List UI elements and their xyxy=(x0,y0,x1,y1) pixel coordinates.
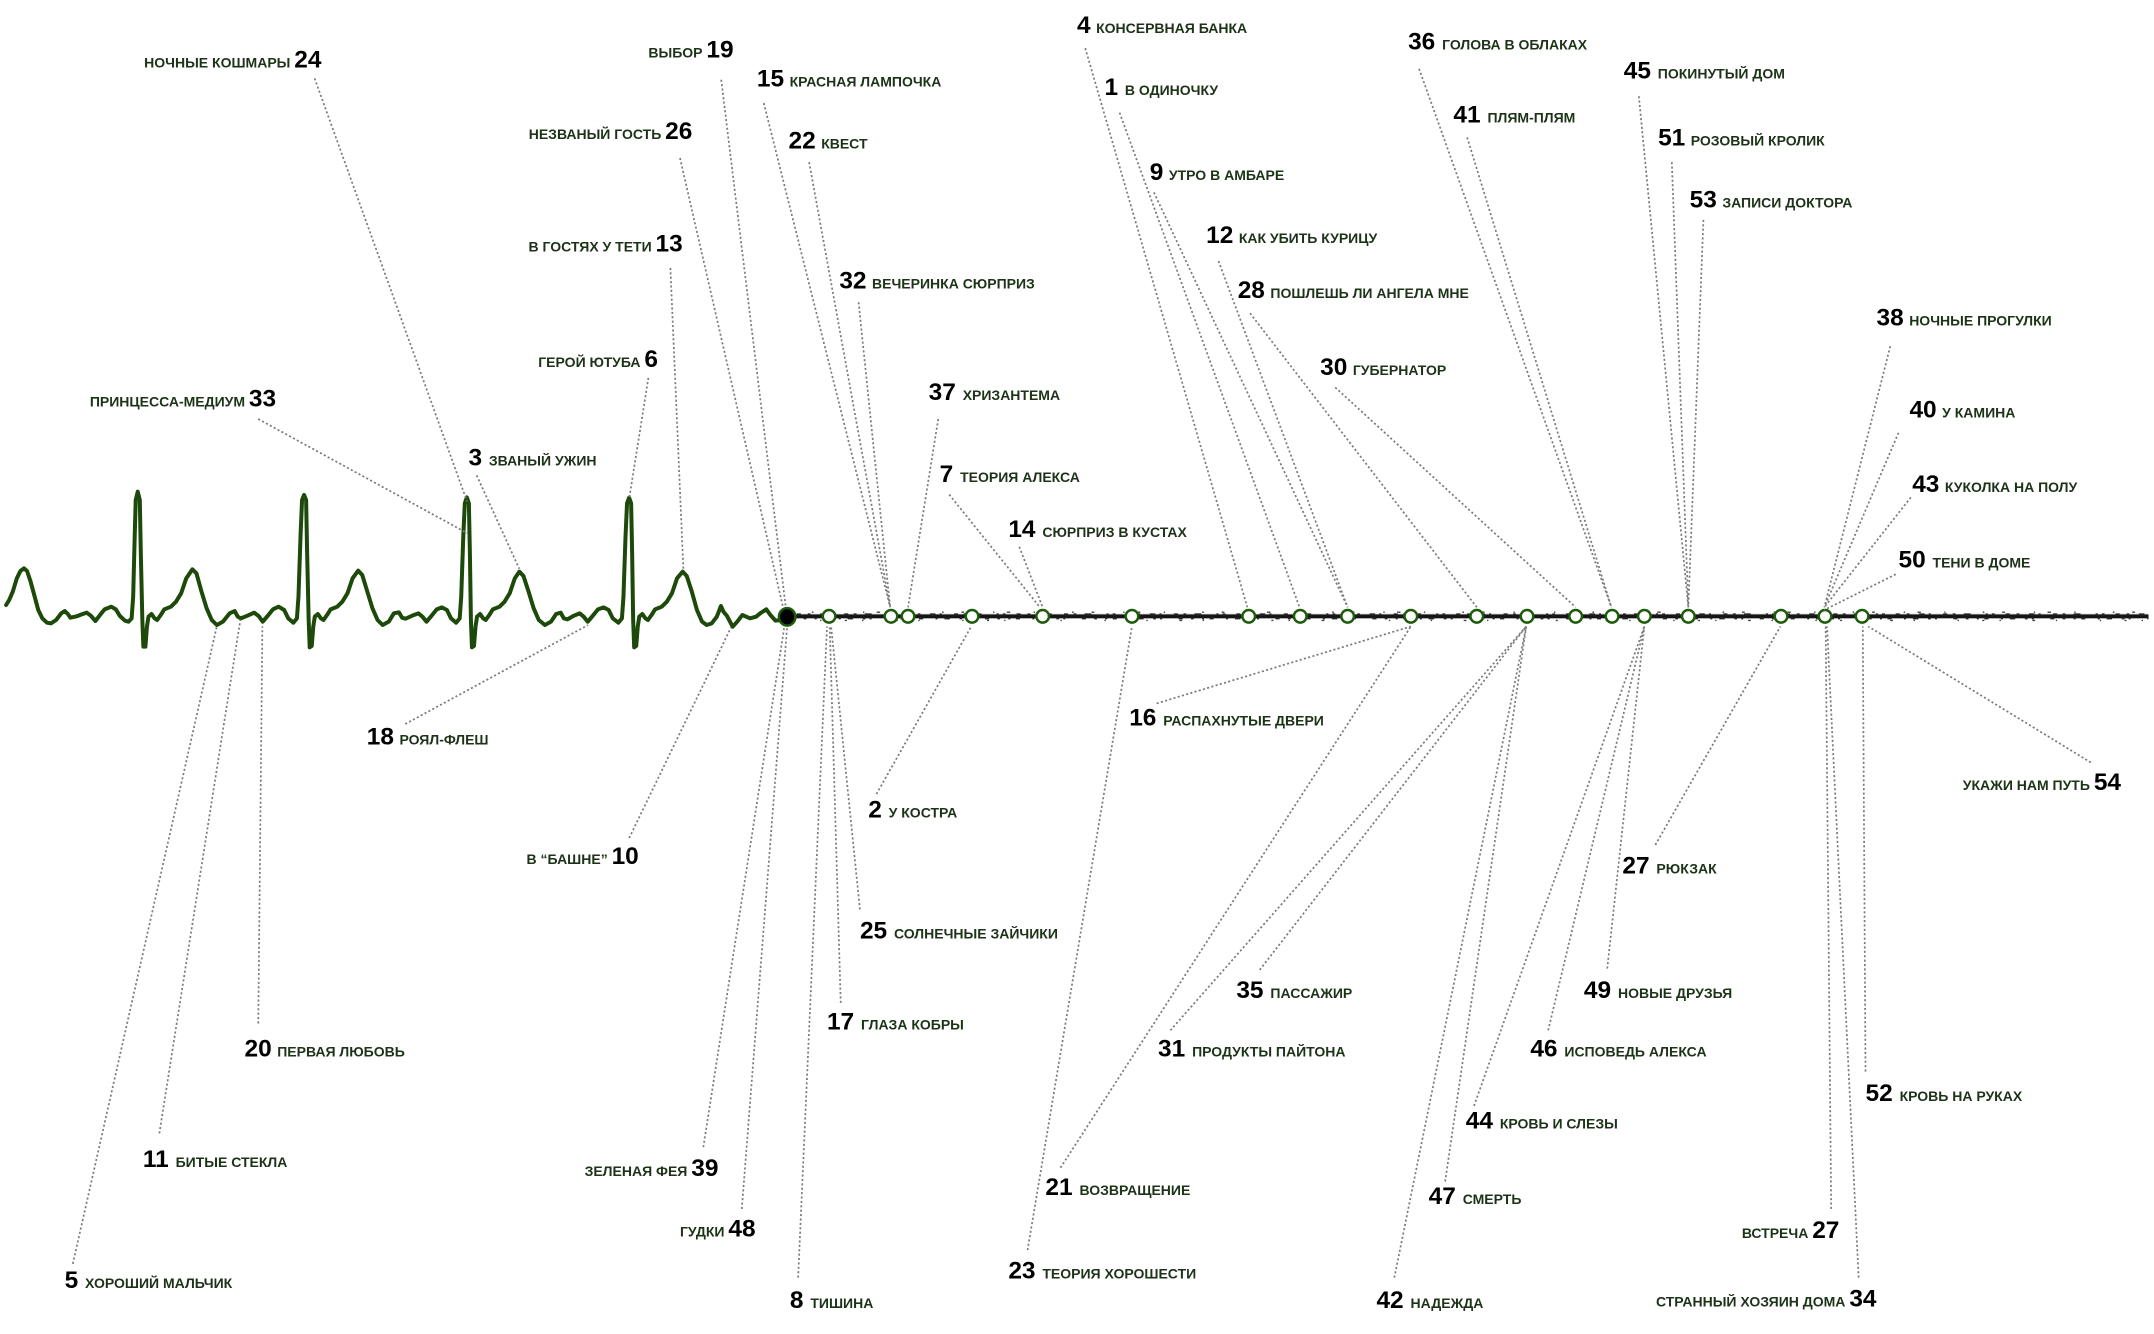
label 26 xyxy=(529,118,783,607)
label 53: 53 ЗАПИСИ ДОКТОРА xyxy=(1690,186,1852,213)
label 21: 21 ВОЗВРАЩЕНИЕ xyxy=(1045,1174,1190,1201)
label 15: 15 КРАСНАЯ ЛАМПОЧКА xyxy=(757,66,941,93)
label 47: 47 СМЕРТЬ xyxy=(1429,1183,1521,1210)
label 33: ПРИНЦЕССА-МЕДИУМ 33 xyxy=(90,386,276,413)
label 20: 20 ПЕРВАЯ ЛЮБОВЬ xyxy=(245,1035,405,1062)
label 27 backpack: 27 РЮКЗАК xyxy=(1622,853,1717,880)
label 51: 51 РОЗОВЫЙ КРОЛИК xyxy=(1658,125,1825,152)
label 14: 14 СЮРПРИЗ В КУСТАХ xyxy=(1008,516,1188,543)
label 20 xyxy=(245,626,405,1062)
label 40 xyxy=(1824,397,2015,607)
label 2 xyxy=(868,626,971,823)
label 42 xyxy=(1376,626,1526,1314)
label 49: 49 НОВЫЕ ДРУЗЬЯ xyxy=(1584,977,1732,1004)
label 35: 35 ПАССАЖИР xyxy=(1236,977,1352,1004)
label 17: 17 ГЛАЗА КОБРЫ xyxy=(827,1009,964,1036)
label 10: В “БАШНЕ” 10 xyxy=(527,843,639,870)
label 28: 28 ПОШЛЕШЬ ЛИ АНГЕЛА МНЕ xyxy=(1238,277,1469,304)
label 8: 8 ТИШИНА xyxy=(790,1287,873,1314)
label 27 meeting: ВСТРЕЧА 27 xyxy=(1742,1217,1839,1244)
label 18: 18 РОЯЛ-ФЛЕШ xyxy=(367,724,489,751)
label 27 meeting xyxy=(1742,626,1839,1244)
label 32: 32 ВЕЧЕРИНКА СЮРПРИЗ xyxy=(839,268,1035,295)
label 28 xyxy=(1238,277,1477,607)
label 30: 30 ГУБЕРНАТОР xyxy=(1320,354,1446,381)
label 41: 41 ПЛЯМ-ПЛЯМ xyxy=(1453,101,1575,128)
flat line after heartbeat xyxy=(787,612,2149,620)
label 50 xyxy=(1824,546,2030,610)
label 47 xyxy=(1429,626,1526,1210)
label 52: 52 КРОВЬ НА РУКАХ xyxy=(1866,1080,2023,1107)
heartbeat ECG line xyxy=(6,492,787,647)
label 48 xyxy=(680,626,787,1242)
label 45 xyxy=(1624,57,1785,607)
label 45: 45 ПОКИНУТЫЙ ДОМ xyxy=(1624,57,1785,84)
label 30 xyxy=(1320,354,1576,607)
label 7 xyxy=(940,461,1080,607)
label 49 xyxy=(1584,626,1732,1004)
label 38 xyxy=(1824,305,2052,607)
label 39 xyxy=(585,626,784,1182)
label 8 xyxy=(790,626,873,1314)
label 54: УКАЖИ НАМ ПУТЬ 54 xyxy=(1963,769,2121,796)
label 23 xyxy=(1008,626,1196,1284)
label 11: 11 БИТЫЕ СТЕКЛА xyxy=(143,1146,287,1173)
label 24 xyxy=(144,46,467,501)
label 23: 23 ТЕОРИЯ ХОРОШЕСТИ xyxy=(1008,1257,1196,1284)
label 1: 1 В ОДИНОЧКУ xyxy=(1104,74,1218,101)
label 37 xyxy=(908,379,1060,607)
label 14 xyxy=(1008,516,1188,607)
label 10 xyxy=(527,628,731,870)
label 54 xyxy=(1868,626,2121,796)
label 42: 42 НАДЕЖДА xyxy=(1376,1287,1483,1314)
label 41 xyxy=(1453,101,1611,607)
label 21 xyxy=(1045,626,1411,1201)
label 22: 22 КВЕСТ xyxy=(789,127,868,154)
label 53 xyxy=(1688,186,1852,607)
label 18 xyxy=(367,625,588,751)
label 7: 7 ТЕОРИЯ АЛЕКСА xyxy=(940,461,1080,488)
label 16: 16 РАСПАХНУТЫЕ ДВЕРИ xyxy=(1129,704,1324,731)
label 38: 38 НОЧНЫЕ ПРОГУЛКИ xyxy=(1877,305,2052,332)
label 1 xyxy=(1104,74,1300,607)
label 46 xyxy=(1530,626,1707,1062)
label 19: ВЫБОР 19 xyxy=(648,37,734,64)
label 25 xyxy=(831,626,1058,944)
label 26: НЕЗВАНЫЙ ГОСТЬ 26 xyxy=(529,118,692,145)
label 32 xyxy=(839,268,1035,607)
label 34 xyxy=(1656,626,1877,1312)
label 50: 50 ТЕНИ В ДОМЕ xyxy=(1898,546,2030,573)
label 3: 3 ЗВАНЫЙ УЖИН xyxy=(468,445,597,472)
label 24: НОЧНЫЕ КОШМАРЫ 24 xyxy=(144,46,322,73)
label 43 xyxy=(1824,471,2078,607)
label 46: 46 ИСПОВЕДЬ АЛЕКСА xyxy=(1530,1035,1707,1062)
label 9: 9 УТРО В АМБАРЕ xyxy=(1150,159,1284,186)
label 15 xyxy=(757,66,941,607)
label 2: 2 У КОСТРА xyxy=(868,796,957,823)
label 43: 43 КУКОЛКА НА ПОЛУ xyxy=(1912,471,2078,498)
label 51 xyxy=(1658,125,1825,607)
label 33 xyxy=(90,386,467,533)
label 12: 12 КАК УБИТЬ КУРИЦУ xyxy=(1206,222,1377,249)
label 36 xyxy=(1408,29,1611,607)
label 27 backpack xyxy=(1622,626,1780,880)
label 25: 25 СОЛНЕЧНЫЕ ЗАЙЧИКИ xyxy=(860,917,1058,944)
label 44 xyxy=(1466,626,1644,1135)
label 48: ГУДКИ 48 xyxy=(680,1215,756,1242)
label 37: 37 ХРИЗАНТЕМА xyxy=(929,379,1060,406)
start node: black dot xyxy=(779,608,795,626)
label 13: В ГОСТЯХ У ТЕТИ 13 xyxy=(528,230,683,257)
label 39: ЗЕЛЕНАЯ ФЕЯ 39 xyxy=(585,1155,718,1182)
label 17 xyxy=(827,626,964,1036)
label 36: 36 ГОЛОВА В ОБЛАКАХ xyxy=(1408,29,1588,56)
label 4 xyxy=(1077,12,1247,607)
label 31: 31 ПРОДУКТЫ ПАЙТОНА xyxy=(1158,1035,1345,1062)
label 40: 40 У КАМИНА xyxy=(1909,397,2015,424)
label 22 xyxy=(789,127,890,607)
label 31 xyxy=(1158,626,1526,1062)
label 19 xyxy=(648,37,786,607)
label 4: 4 КОНСЕРВНАЯ БАНКА xyxy=(1077,12,1247,39)
label 6: ГЕРОЙ ЮТУБА 6 xyxy=(538,346,658,373)
label 16 xyxy=(1129,626,1411,731)
label 3 xyxy=(468,445,597,569)
label 34: СТРАННЫЙ ХОЗЯИН ДОМА 34 xyxy=(1656,1285,1877,1312)
label 12 xyxy=(1206,222,1377,607)
label 9 xyxy=(1150,159,1348,607)
label 35 xyxy=(1236,626,1526,1004)
label 13 xyxy=(528,230,683,570)
label 11 xyxy=(143,620,287,1173)
label 5 xyxy=(65,625,233,1294)
label 44: 44 КРОВЬ И СЛЕЗЫ xyxy=(1466,1108,1618,1135)
timeline nodes xyxy=(823,610,1868,623)
label 5: 5 ХОРОШИЙ МАЛЬЧИК xyxy=(65,1267,233,1294)
label 6 xyxy=(538,346,658,499)
